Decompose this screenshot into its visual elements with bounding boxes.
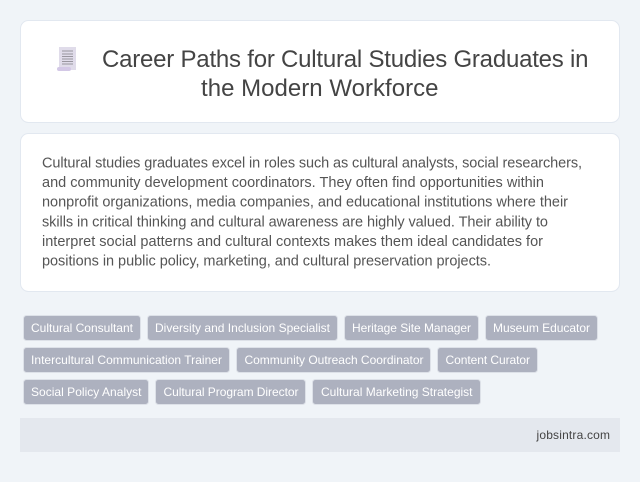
tag: Intercultural Communication Trainer: Intercultural Communication Trainer [31, 353, 222, 367]
title [102, 46, 588, 102]
tag: Cultural Consultant [24, 316, 140, 340]
title: Career Paths for Cultural Studies Graduates in [102, 46, 588, 73]
tag: Intercultural Communication Trainer [24, 348, 230, 372]
tag: Community Outreach Coordinator: Community Outreach Coordinator [244, 353, 424, 367]
tag: Content Curator [438, 348, 538, 372]
tag: Cultural Consultant: Cultural Consultant [31, 321, 134, 335]
tag: Social Policy Analyst [24, 380, 148, 404]
tag: Community Outreach Coordinator [236, 348, 430, 372]
tag: Museum Educator [486, 316, 598, 340]
footer: source: jobsintra.com [536, 428, 610, 442]
tag: Cultural Program Director [156, 380, 306, 404]
tag: Museum Educator: Museum Educator [493, 321, 590, 335]
text block: description: nonprofit organizations, media companies, and educational institutions where their [42, 195, 568, 211]
tag: Social Policy Analyst: Social Policy Analyst [31, 385, 142, 399]
text block: description: positions in public policy, marketing, and cultural preservation projects. [42, 254, 491, 270]
tag: Cultural Program Director: Cultural Program Director [164, 385, 298, 399]
text block: description: and community development coordinators. They often find opportunities within [42, 175, 544, 191]
title: the Modern Workforce [201, 75, 438, 102]
tag: Cultural Marketing Strategist: Cultural Marketing Strategist [321, 385, 473, 399]
panel: title card [20, 20, 620, 122]
text block: description: interpret social patterns and cultural contexts makes them ideal candidates for [42, 234, 543, 250]
tag: Cultural Marketing Strategist [312, 380, 480, 404]
icon: document scroll [57, 47, 76, 71]
tag: Heritage Site Manager [344, 316, 478, 340]
tag: Diversity and Inclusion Specialist [148, 316, 338, 340]
footer bar [20, 418, 620, 452]
tag: Heritage Site Manager: Heritage Site Manager [352, 321, 471, 335]
text block: description: skills in critical thinking and cultural awareness are highly valued. Their ability to [42, 214, 548, 230]
panel: description [20, 134, 620, 292]
tags: career paths [24, 316, 598, 404]
tag: Content Curator: Content Curator [446, 353, 530, 367]
text block: description [42, 156, 582, 270]
tag: Diversity and Inclusion Specialist: Diversity and Inclusion Specialist [155, 321, 331, 335]
text block: description: Cultural studies graduates excel in roles such as cultural analysts, social researchers, [42, 156, 582, 172]
